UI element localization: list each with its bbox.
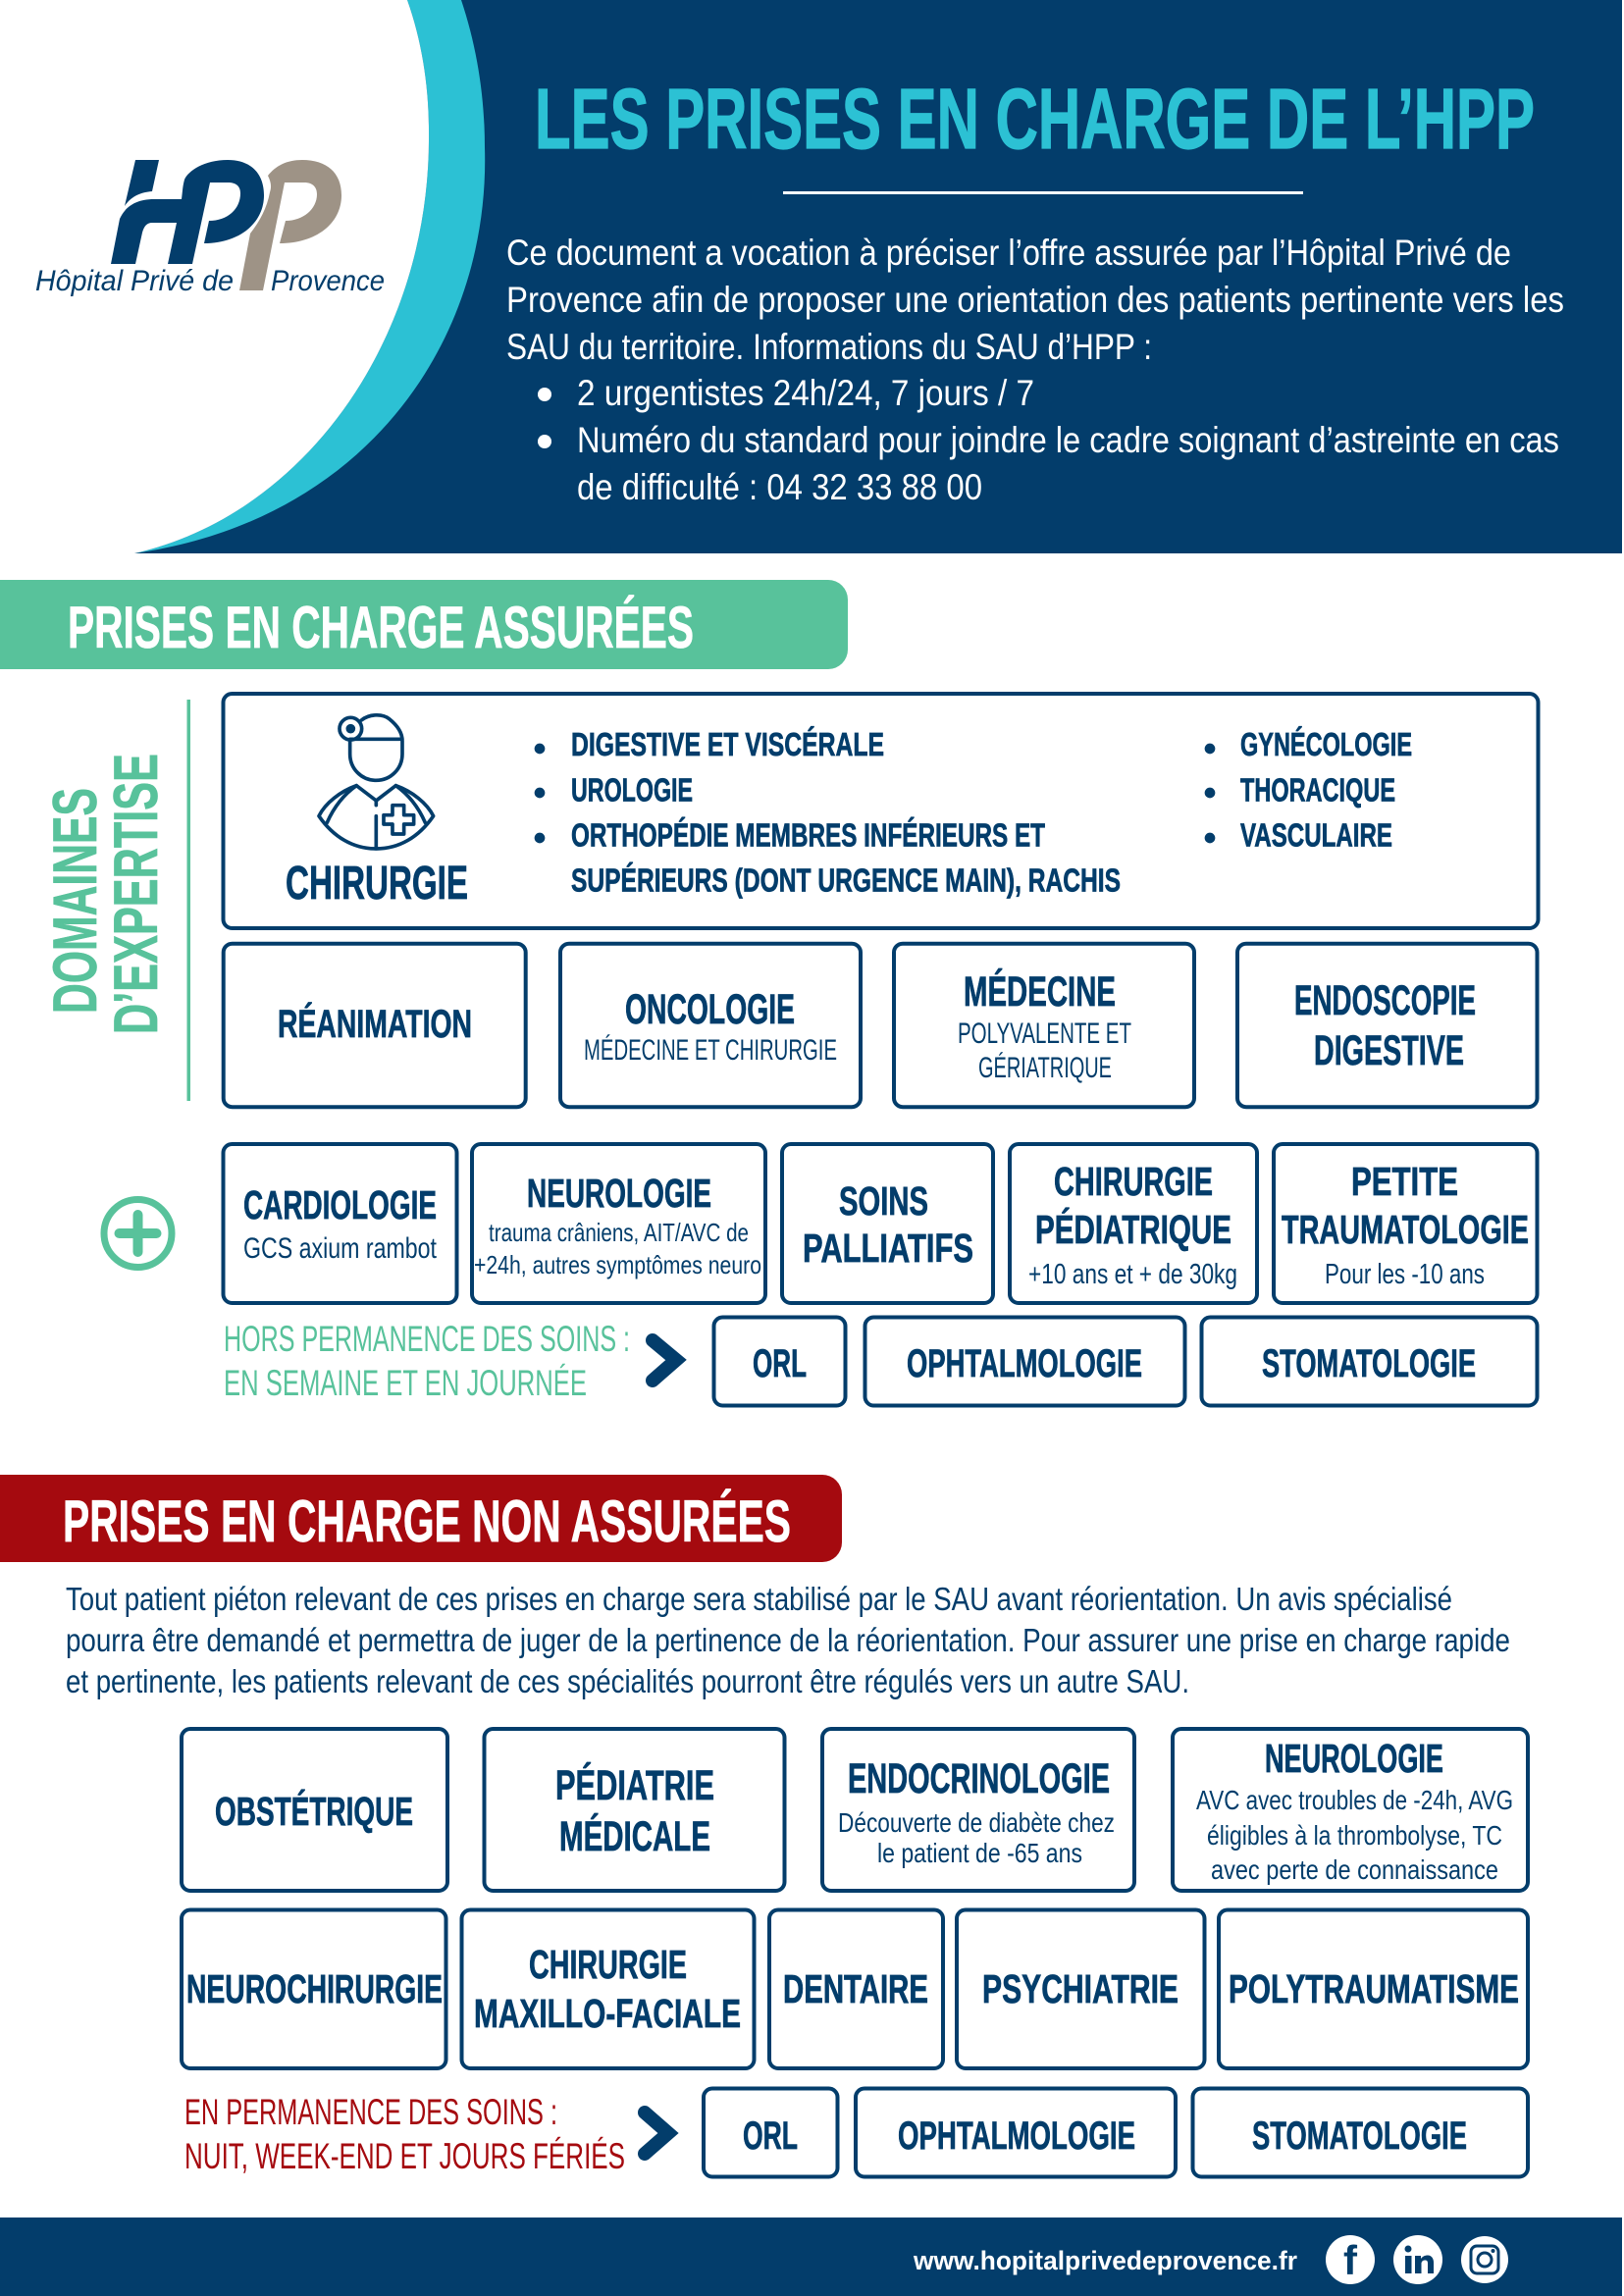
panel: pédiatrie médicale: PÉDIATRIE: [555, 1762, 714, 1809]
teal curve: [134, 0, 485, 553]
logo: Hôpital Privé de Provence: Hôpital Privé de: [35, 265, 234, 297]
panel: endocrinologie: Découverte de diabète chez: [838, 1807, 1115, 1838]
list: right specialties: THORACIQUE: [1240, 771, 1395, 809]
panel: chirurgie pédiatrique: +10 ans et + de 30kg: [1028, 1259, 1237, 1290]
list: left specialties: DIGESTIVE ET VISCÉRALE: [571, 726, 884, 762]
panel: neurologie non assurée: AVC avec troubles de -24h, AVG: [1196, 1785, 1513, 1815]
panel: ophtalmologie non assurée: [856, 2088, 1176, 2176]
panel: chirurgie pédiatrique: CHIRURGIE: [1054, 1159, 1213, 1204]
label: hors permanence des soins: [224, 1319, 630, 1403]
icon: facebook: [1326, 2235, 1375, 2284]
intro text block: 2 urgentistes 24h/24, 7 jours / 7: [577, 373, 1034, 413]
panel: pédiatrie médicale: [485, 1729, 785, 1891]
panel: dentaire: [769, 1909, 943, 2068]
panel: psychiatrie: PSYCHIATRIE: [982, 1966, 1179, 2011]
panel: psychiatrie: [957, 1909, 1205, 2068]
icon: facebook: f: [1343, 2237, 1358, 2283]
panel: ORL non assuré: [704, 2088, 838, 2176]
list: right specialties: [1205, 726, 1412, 854]
label: en permanence des soins: EN PERMANENCE DES SOINS :: [184, 2092, 557, 2132]
arrow: chevron: [653, 1340, 676, 1381]
panel: endocrinologie: [822, 1729, 1134, 1891]
vertical heading: domaines d'expertise: D’EXPERTISE: [102, 754, 171, 1034]
panel: stomatologie: [1201, 1317, 1537, 1405]
header band: [0, 0, 1622, 553]
logo: Hôpital Privé de Provence: Provence: [271, 265, 385, 297]
panel: ophtalmologie: OPHTALMOLOGIE: [907, 1342, 1142, 1385]
panel: oncologie: ONCOLOGIE: [625, 986, 795, 1033]
intro text block: de difficulté : 04 32 33 88 00: [577, 467, 982, 507]
vertical heading: domaines d'expertise: DOMAINES: [41, 788, 110, 1014]
panel: stomatologie non assurée: [1193, 2088, 1528, 2176]
panel: ORL: ORL: [753, 1342, 807, 1385]
banner: prises en charge non assurées: [0, 1475, 842, 1562]
panel: stomatologie non assurée: STOMATOLOGIE: [1252, 2114, 1467, 2158]
panel: chirurgie: [224, 694, 1539, 928]
panel: petite traumatologie: Pour les -10 ans: [1325, 1259, 1485, 1290]
logo: Hôpital Privé de Provence: [35, 160, 385, 297]
panel: stomatologie: STOMATOLOGIE: [1262, 1342, 1476, 1385]
panel: petite traumatologie: PETITE: [1351, 1159, 1458, 1204]
footer: [0, 2218, 1622, 2296]
icon: surgeon: [319, 715, 434, 849]
list: left specialties: SUPÉRIEURS (DONT URGENCE MAIN), RACHIS: [571, 861, 1121, 899]
heading: chirurgie: CHIRURGIE: [286, 858, 468, 910]
banner: prises en charge non assurées: PRISES EN CHARGE NON ASSURÉES: [63, 1488, 791, 1554]
panel: endoscopie digestive: DIGESTIVE: [1314, 1027, 1464, 1074]
panel: neurologie non assurée: avec perte de connaissance: [1211, 1854, 1498, 1885]
icon: linkedin: [1393, 2235, 1442, 2284]
list: left specialties: UROLOGIE: [571, 771, 693, 809]
vertical heading: domaines d'expertise: [41, 754, 171, 1034]
panel: neurologie non assurée: NEUROLOGIE: [1265, 1736, 1443, 1781]
panel: réanimation: [224, 944, 526, 1107]
panel: réanimation: RÉANIMATION: [278, 1002, 472, 1046]
panel: chirurgie maxillo-faciale: [461, 1909, 754, 2068]
panel: neurochirurgie: NEUROCHIRURGIE: [186, 1966, 443, 2011]
panel: chirurgie maxillo-faciale: MAXILLO-FACIALE: [474, 1991, 741, 2036]
panel: pédiatrie médicale: MÉDICALE: [559, 1813, 710, 1860]
panel: ORL: [714, 1317, 846, 1405]
panel: oncologie: MÉDECINE ET CHIRURGIE: [584, 1034, 837, 1067]
label: en permanence des soins: NUIT, WEEK-END ET JOURS FÉRIÉS: [184, 2136, 625, 2176]
panel: cardiologie: GCS axium rambot: [243, 1232, 438, 1265]
panel: endocrinologie: le patient de -65 ans: [877, 1838, 1082, 1868]
panel: chirurgie pédiatrique: PÉDIATRIQUE: [1035, 1207, 1231, 1252]
label: hors permanence des soins: EN SEMAINE ET EN JOURNÉE: [224, 1363, 587, 1403]
panel: petite traumatologie: TRAUMATOLOGIE: [1282, 1207, 1529, 1252]
panel: dentaire: DENTAIRE: [783, 1966, 928, 2011]
label: en permanence des soins: [184, 2092, 625, 2176]
paragraph: réorientation: et pertinente, les patients relevant de ces spécialités pourront être régulés vers un autre SAU.: [66, 1663, 1189, 1699]
panel: médecine: GÉRIATRIQUE: [978, 1052, 1112, 1084]
panel: obstétrique: [182, 1729, 447, 1891]
panel: obstétrique: OBSTÉTRIQUE: [215, 1789, 413, 1834]
panel: neurologie: NEUROLOGIE: [527, 1171, 711, 1216]
panel: soins palliatifs: PALLIATIFS: [803, 1226, 973, 1271]
panel: médecine: MÉDECINE: [964, 968, 1116, 1016]
panel: médecine: POLYVALENTE ET: [958, 1018, 1131, 1050]
banner: prises en charge assurées: PRISES EN CHARGE ASSURÉES: [68, 595, 694, 660]
icon: instagram: [1461, 2236, 1508, 2283]
panel: endoscopie digestive: [1237, 944, 1537, 1107]
panel: oncologie: [560, 944, 861, 1107]
label: hors permanence des soins: HORS PERMANENCE DES SOINS :: [224, 1319, 630, 1359]
panel: soins palliatifs: SOINS: [839, 1178, 928, 1224]
panel: chirurgie pédiatrique: [1010, 1144, 1257, 1303]
intro text block: [506, 233, 1564, 507]
white logo area: [0, 0, 429, 553]
panel: neurologie non assurée: [1173, 1729, 1528, 1891]
paragraph: réorientation: [66, 1581, 1510, 1699]
panel: polytraumatisme: [1219, 1909, 1528, 2068]
panel: cardiologie: CARDIOLOGIE: [243, 1182, 437, 1227]
panel: ophtalmologie: [865, 1317, 1185, 1405]
panel: neurochirurgie: [182, 1909, 445, 2068]
intro text block: SAU du territoire. Informations du SAU d’HPP :: [506, 327, 1152, 367]
arrow: chevron: [645, 2113, 668, 2154]
panel: polytraumatisme: POLYTRAUMATISME: [1229, 1966, 1519, 2011]
panel: petite traumatologie: [1274, 1144, 1537, 1303]
panel: médecine: [894, 944, 1194, 1107]
panel: neurologie: [472, 1144, 765, 1303]
list: left specialties: [535, 726, 1121, 899]
panel: endoscopie digestive: ENDOSCOPIE: [1294, 977, 1476, 1024]
panel: neurologie: +24h, autres symptômes neuro: [474, 1250, 761, 1279]
icon: plus in circle: [104, 1199, 172, 1268]
panel: ophtalmologie non assurée: OPHTALMOLOGIE: [898, 2114, 1135, 2158]
panel: neurologie: trauma crâniens, AIT/AVC de: [489, 1218, 749, 1247]
list: left specialties: ORTHOPÉDIE MEMBRES INFÉRIEURS ET: [571, 816, 1045, 854]
panel: soins palliatifs: [782, 1144, 993, 1303]
list: right specialties: GYNÉCOLOGIE: [1240, 726, 1412, 762]
panel: chirurgie maxillo-faciale: CHIRURGIE: [529, 1942, 687, 1987]
list: right specialties: VASCULAIRE: [1240, 816, 1392, 854]
intro text block: Ce document a vocation à préciser l’offre assurée par l’Hôpital Privé de: [506, 233, 1511, 273]
website url: www.hopitalprivedeprovence.fr: [913, 2246, 1297, 2275]
panel: ORL non assuré: ORL: [743, 2114, 798, 2158]
panel: endocrinologie: ENDOCRINOLOGIE: [848, 1755, 1110, 1802]
panel: cardiologie: [224, 1144, 457, 1303]
banner: prises en charge assurées: [0, 580, 848, 669]
panel: neurologie non assurée: éligibles à la thrombolyse, TC: [1207, 1820, 1502, 1851]
